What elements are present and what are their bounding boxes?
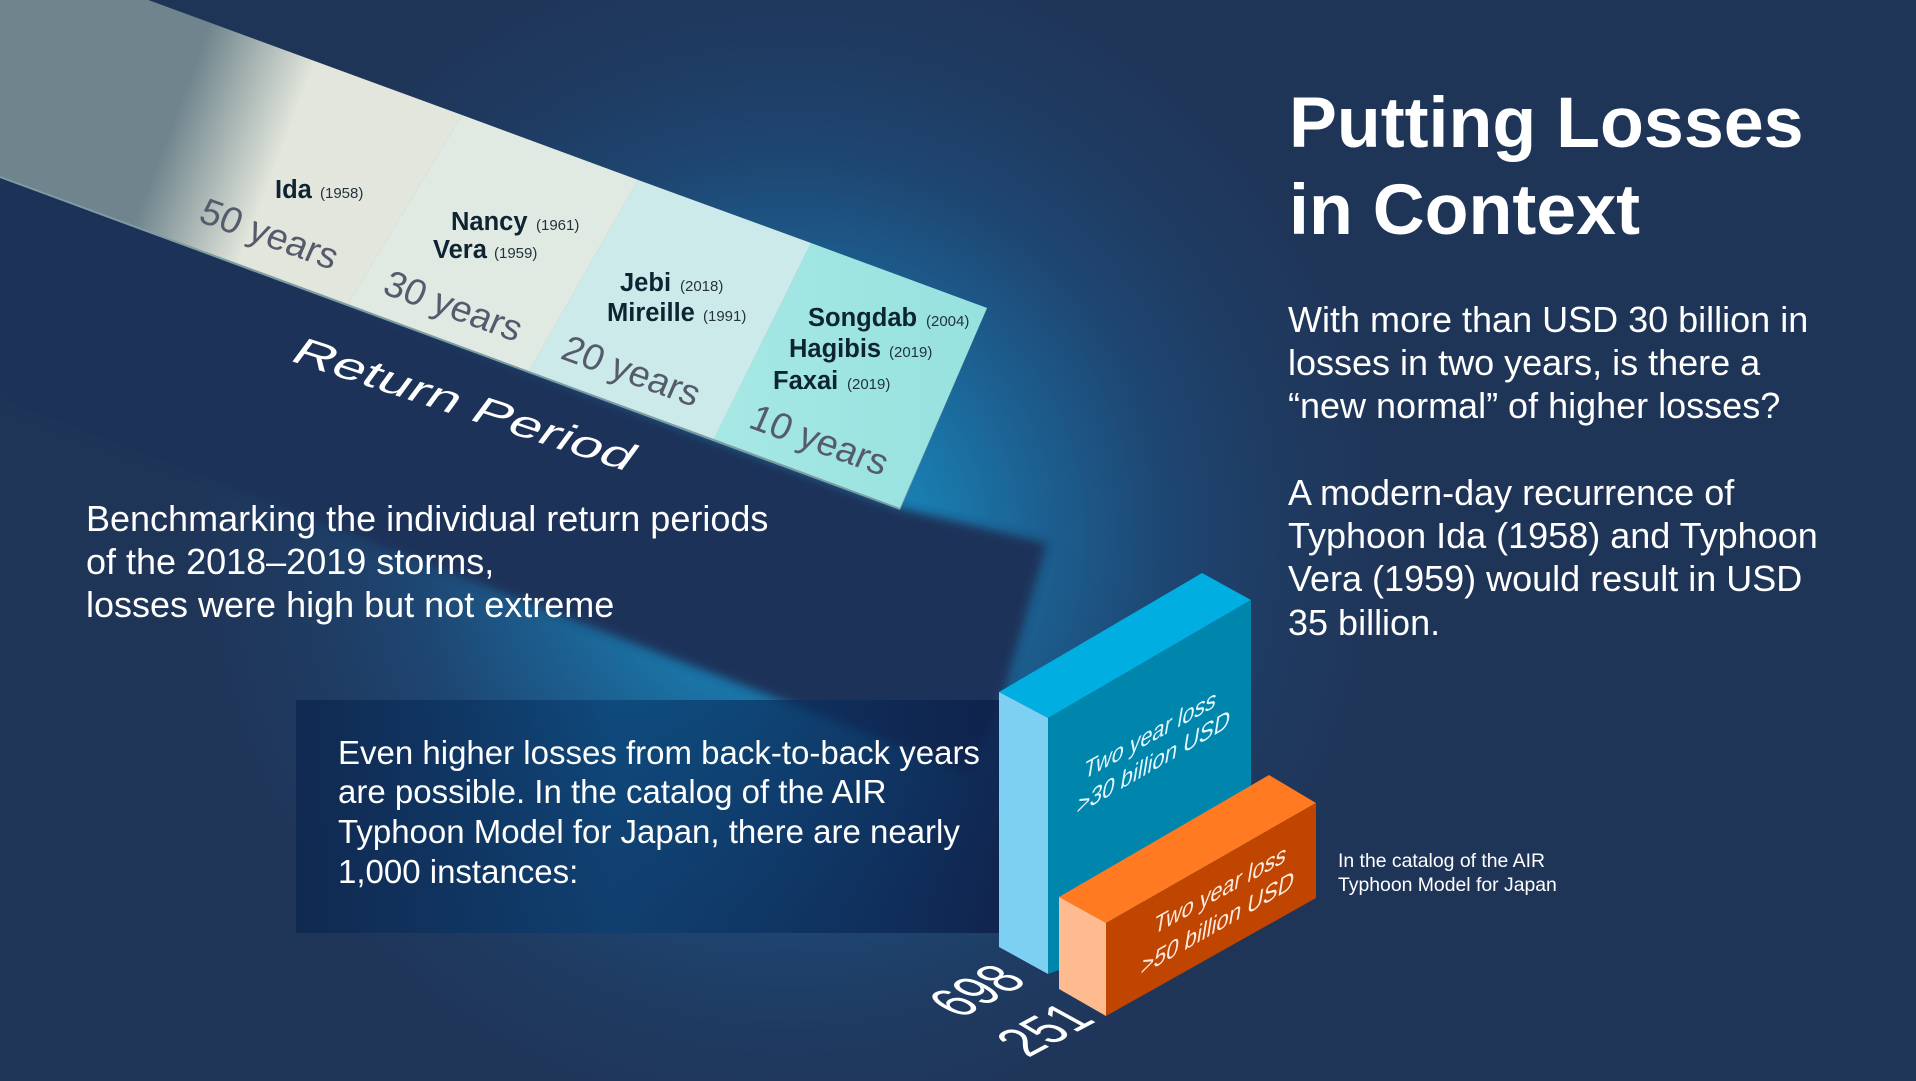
segment: 30 years: Vera	[433, 236, 488, 264]
segment: 10 years: (2019)	[889, 344, 932, 361]
segment: 10 years: (2019)	[847, 376, 890, 393]
body text: modern-day recurrence: Vera (1959) would result in USD	[1288, 558, 1802, 599]
orange bar label: Two year loss	[1152, 839, 1289, 941]
segment: 30 years: (1959)	[494, 245, 537, 262]
return period ribbon	[0, 0, 987, 510]
panel text: Even higher losses from back-to-back years	[338, 734, 980, 771]
benchmarking text: losses were high but not extreme	[86, 584, 614, 625]
body text: new normal: With more than USD 30 billion in	[1288, 299, 1808, 340]
segment: 30 years: (1961)	[536, 217, 579, 234]
orange bar label: >50 billion USD	[1139, 864, 1297, 982]
segment: 20 years: (2018)	[680, 278, 723, 295]
segment: 50 years: 50 years	[194, 190, 345, 277]
panel text: Typhoon Model for Japan, there are nearly	[338, 813, 960, 850]
segment: 20 years	[556, 269, 746, 414]
catalog note: In the catalog of the AIR	[1338, 850, 1545, 872]
text panel	[296, 700, 999, 933]
segment: 10 years: 10 years	[744, 396, 895, 483]
benchmarking text: Benchmarking the individual return periods	[86, 498, 768, 539]
segment: 30 years: Nancy	[451, 208, 528, 236]
title: Putting Losses	[1289, 83, 1804, 163]
segment: 30 years: 30 years	[378, 262, 529, 349]
panel text: 1,000 instances:	[338, 853, 578, 890]
blue bar label: Two year loss	[1082, 684, 1219, 786]
value label: 698: 698	[913, 956, 1041, 1025]
segment: 20 years: Mireille	[607, 299, 695, 327]
segment: 50 years: Ida	[275, 176, 313, 204]
blue bar label: >30 billion USD	[1075, 703, 1233, 821]
segment: 20 years: Jebi	[620, 269, 671, 297]
panel text: are possible. In the catalog of the AIR	[338, 773, 887, 810]
segment: 10 years: Songdab	[808, 304, 917, 332]
segment: 10 years: Hagibis	[789, 335, 881, 363]
segment: 50 years: (1958)	[320, 185, 363, 202]
body text: new normal: “new normal” of higher losses?	[1288, 385, 1780, 426]
blue 3D bar: 698 instances	[999, 573, 1251, 974]
return period axis label: Return Period	[283, 330, 648, 478]
body text: modern-day recurrence: A modern-day recurrence of	[1288, 472, 1735, 513]
ribbon shadow	[0, 176, 1047, 775]
orange 3D bar: 251 instances	[1059, 775, 1316, 1016]
value label: 251: 251	[981, 995, 1109, 1064]
body text: modern-day recurrence: Typhoon Ida (1958) and Typhoon	[1288, 515, 1818, 556]
body text: modern-day recurrence: 35 billion.	[1288, 602, 1440, 643]
segment: 30 years	[378, 208, 579, 349]
segment: 10 years	[744, 304, 969, 483]
segment: 20 years: 20 years	[556, 327, 707, 414]
title: in Context	[1289, 170, 1640, 250]
body text: new normal: losses in two years, is there a	[1288, 342, 1761, 383]
segment: 10 years: (2004)	[926, 313, 969, 330]
catalog note: Typhoon Model for Japan	[1338, 874, 1557, 896]
segment: 10 years: Faxai	[773, 367, 838, 395]
segment: 20 years: (1991)	[703, 308, 746, 325]
benchmarking text: of the 2018–2019 storms,	[86, 541, 494, 582]
